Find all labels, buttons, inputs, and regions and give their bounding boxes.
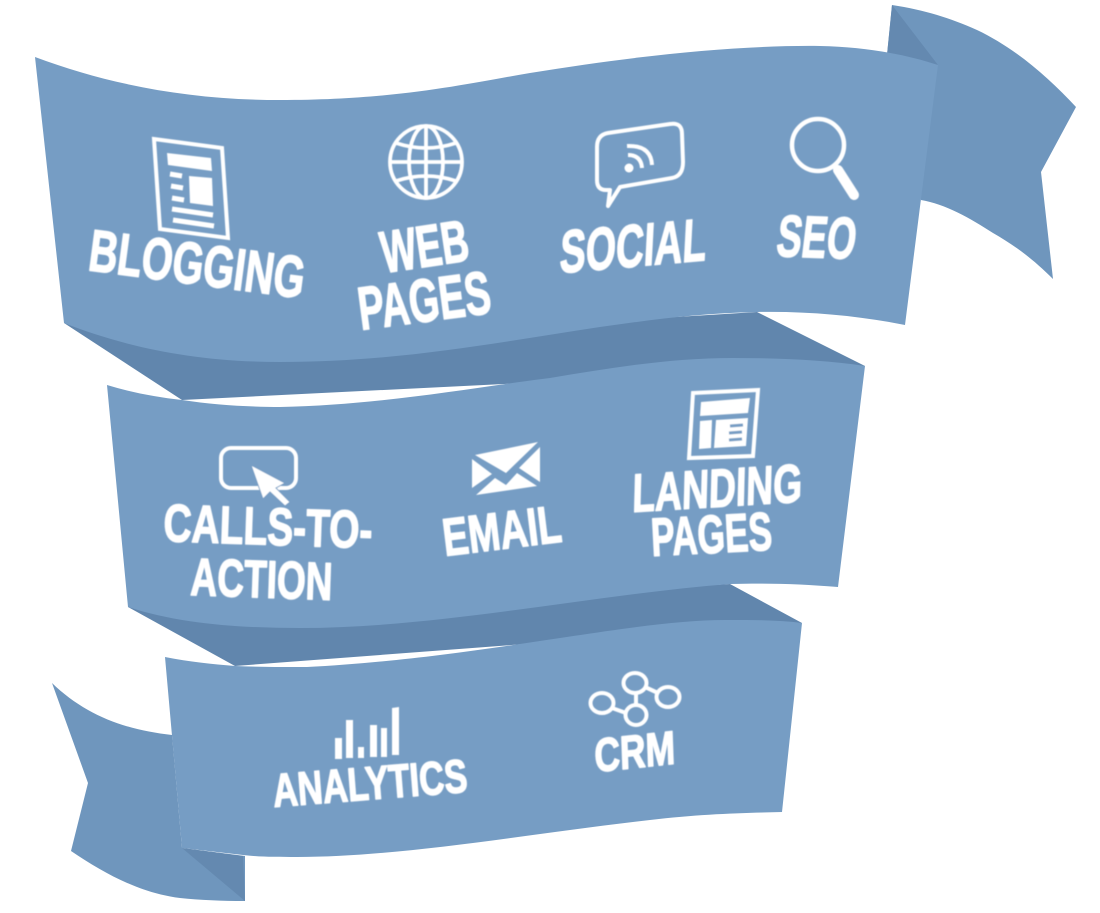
label: SEO: SEO: [773, 202, 861, 272]
item: blogging: [85, 139, 309, 311]
ribbon tail: bottom left: [52, 683, 245, 901]
item: crm: [590, 673, 680, 782]
item: calls to action: [163, 448, 374, 612]
label: EMAIL: EMAIL: [439, 495, 565, 568]
label: ACTION: ACTION: [190, 548, 334, 612]
label: SOCIAL: SOCIAL: [558, 205, 708, 286]
item: analytics: [271, 707, 469, 817]
label: PAGES: PAGES: [649, 502, 773, 568]
icon: speech bubble with feed: [597, 124, 683, 206]
icon: magnifying glass: [792, 119, 854, 195]
label: PAGES: PAGES: [354, 258, 495, 343]
item: seo: [773, 119, 861, 272]
item: landing pages: [632, 390, 803, 568]
ribbon panel: top: [35, 46, 938, 362]
icon: globe: [390, 126, 462, 198]
ribbon fold shadow: upper: [64, 312, 865, 400]
label: LANDING: LANDING: [632, 454, 803, 524]
item: web pages: [354, 126, 495, 343]
item: email: [439, 442, 565, 568]
label: BLOGGING: BLOGGING: [85, 217, 309, 311]
ribbon tail: top right: [887, 5, 1076, 279]
icon: bar chart: [335, 707, 399, 759]
label: CRM: CRM: [593, 721, 676, 782]
label: CALLS-TO-: CALLS-TO-: [163, 494, 374, 560]
icon: page layout: [689, 390, 758, 458]
icon: connected nodes: [590, 673, 680, 725]
ribbon panel: bottom: [165, 620, 802, 857]
icon: newspaper: [154, 139, 228, 238]
ribbon panel: middle: [107, 358, 865, 628]
ribbon fold shadow: lower: [128, 584, 802, 666]
item: social: [558, 124, 708, 286]
icon: envelope: [472, 442, 540, 495]
icon: button with cursor: [221, 448, 296, 506]
label: ANALYTICS: ANALYTICS: [271, 749, 469, 817]
label: WEB: WEB: [376, 208, 473, 286]
